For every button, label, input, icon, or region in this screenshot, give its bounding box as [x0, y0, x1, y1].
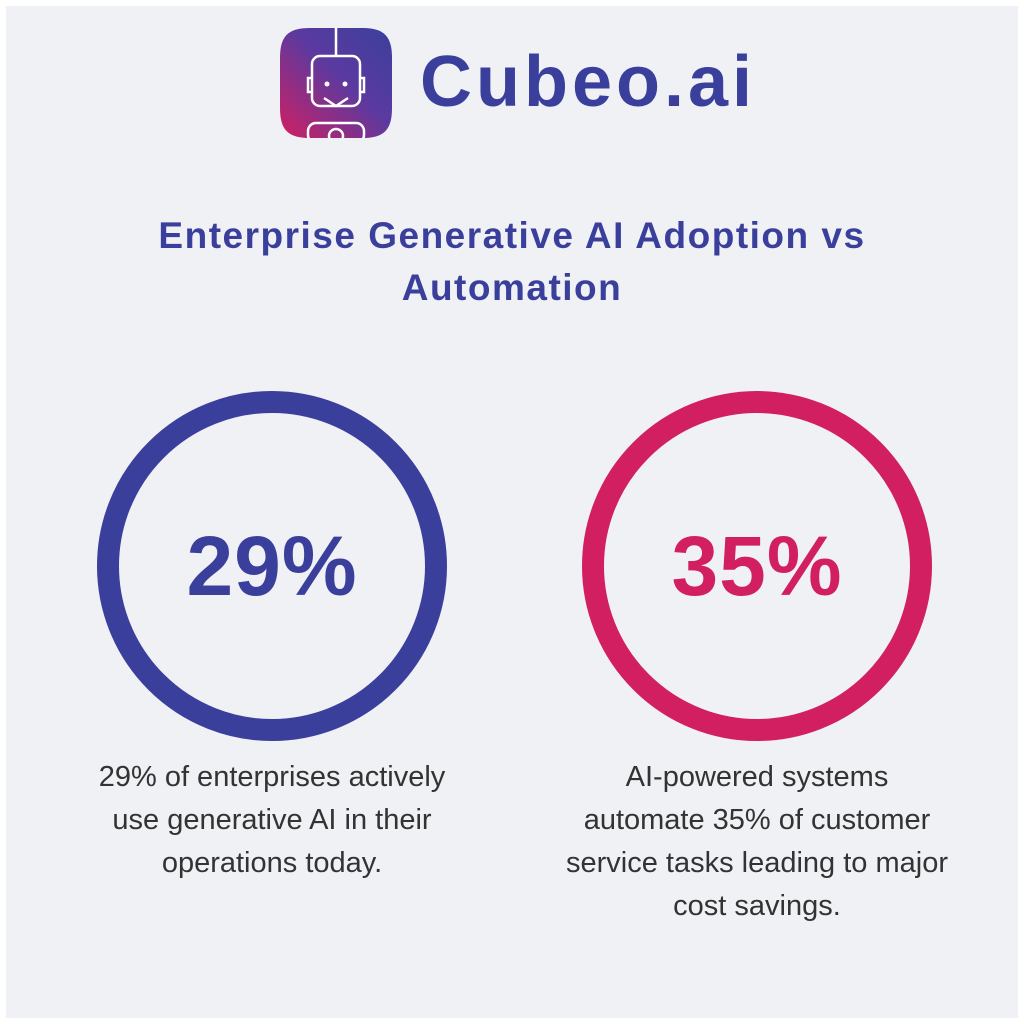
- text: left description: use generative AI in their: [112, 804, 432, 836]
- text: right description: AI-powered systems: [626, 761, 888, 793]
- panel: right stat: [566, 391, 948, 922]
- text: right description: service tasks leading to major: [566, 847, 948, 879]
- ring: pink: [582, 391, 932, 741]
- logo text: Cubeo.ai: [420, 42, 756, 122]
- logo: [280, 28, 756, 138]
- number: 35%: 35%: [671, 519, 843, 613]
- text: right description: cost savings.: [673, 890, 841, 922]
- panel: left stat: [97, 391, 447, 879]
- title: Automation: [402, 267, 622, 308]
- text: left description: [99, 761, 446, 879]
- text: right description: automate 35% of customer: [584, 804, 930, 836]
- ring: blue: [97, 391, 447, 741]
- text: left description: 29% of enterprises actively: [99, 761, 445, 793]
- text: right description: [566, 761, 948, 922]
- text: left description: operations today.: [162, 847, 382, 879]
- number: 29%: 29%: [186, 519, 358, 613]
- title: [158, 215, 866, 308]
- title: Enterprise Generative AI Adoption vs: [158, 215, 866, 256]
- icon: robot: [280, 28, 392, 138]
